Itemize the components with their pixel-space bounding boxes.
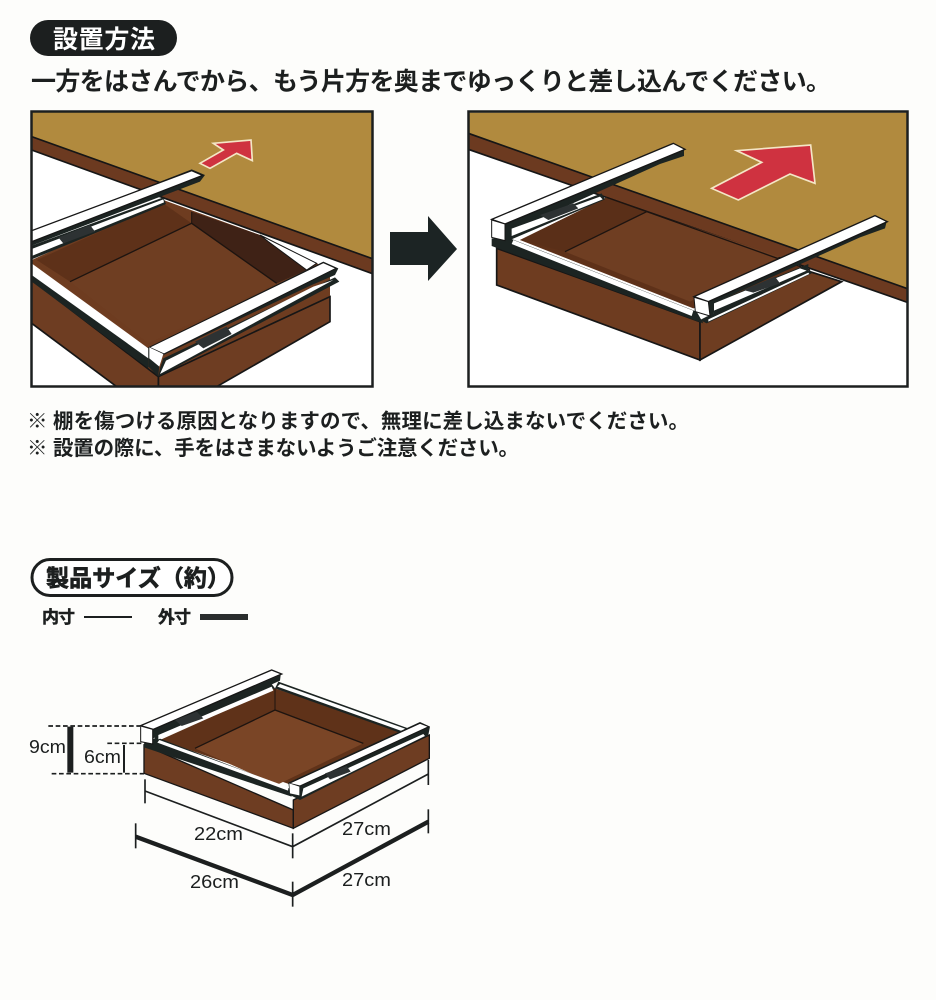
- arrow: step 1 to step 2: [390, 216, 457, 281]
- caution notes: [27, 410, 689, 460]
- caution notes: ※: [27, 437, 48, 460]
- dimension labels: 26cm: [190, 872, 239, 892]
- dimension labels: 27cm: [342, 870, 391, 890]
- product size illustration: [48, 670, 430, 907]
- legend: inner dimension: 内寸: [42, 608, 75, 627]
- caution notes: 棚を傷つける原因となりますので、無理に差し込まないでください。: [53, 410, 689, 433]
- heading pill: 設置方法: [30, 20, 177, 56]
- dimension labels: 6cm: [84, 747, 121, 767]
- panel: step 2 illustration: [468, 112, 908, 387]
- legend: outer dimension: [158, 608, 248, 627]
- caution notes: 設置の際に、手をはさまないようご注意ください。: [53, 436, 519, 460]
- instruction text: 一方をはさんでから、もう片方を奥までゆっくりと差し込んでください。: [31, 68, 831, 96]
- dimension labels: [29, 737, 391, 892]
- caution notes: ※: [27, 410, 48, 433]
- dimension labels: 27cm: [342, 819, 391, 839]
- heading pill: 製品サイズ(約): 製品サイズ（約）: [46, 565, 230, 591]
- dimension labels: 22cm: [194, 824, 243, 844]
- legend: outer dimension: 外寸: [158, 608, 191, 627]
- panel: step 1 illustration: [30, 110, 375, 388]
- heading pill: 設置方法: 設置方法: [53, 26, 155, 54]
- legend: inner dimension: [42, 608, 132, 627]
- dimension labels: 9cm: [29, 737, 66, 757]
- heading pill: 製品サイズ(約): [32, 560, 232, 596]
